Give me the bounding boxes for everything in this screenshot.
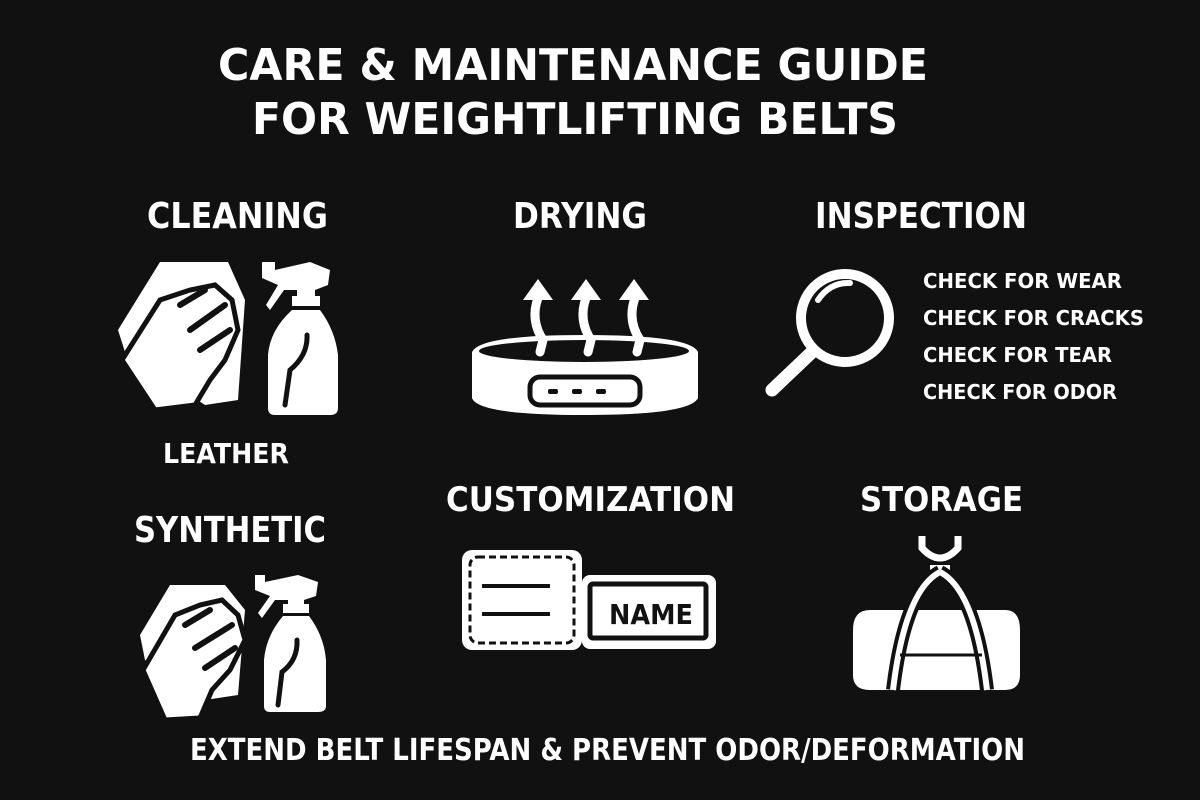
heading: synthetic: SYNTHETIC	[134, 510, 326, 551]
icon: leather cleaning hand and spray	[118, 262, 338, 415]
title	[218, 40, 928, 145]
icon: patch and name tag: NAME	[609, 598, 693, 631]
inspection checklist: CHECK FOR ODOR	[923, 380, 1117, 404]
icon: magnifying glass	[772, 274, 889, 390]
title: FOR WEIGHTLIFTING BELTS	[252, 94, 898, 145]
inspection checklist	[923, 269, 1144, 404]
footer tagline: EXTEND BELT LIFESPAN & PREVENT ODOR/DEFORMATION	[190, 733, 1025, 768]
icon: drying belt with steam arrows	[472, 279, 698, 415]
heading: inspection: INSPECTION	[815, 196, 1027, 237]
heading: storage: STORAGE	[860, 480, 1023, 520]
inspection checklist: CHECK FOR TEAR	[923, 343, 1112, 367]
inspection checklist: CHECK FOR CRACKS	[923, 306, 1144, 330]
icon: patch and name tag	[462, 550, 716, 650]
icon: gym bag hanging	[853, 536, 1020, 690]
heading: customization: CUSTOMIZATION	[446, 480, 735, 520]
icon: synthetic cleaning hand and spray	[140, 575, 326, 720]
heading: cleaning: CLEANING	[147, 196, 328, 237]
label: leather: LEATHER	[163, 437, 289, 470]
heading: drying: DRYING	[513, 196, 647, 237]
inspection checklist: CHECK FOR WEAR	[923, 269, 1122, 293]
title: CARE & MAINTENANCE GUIDE	[218, 40, 928, 91]
